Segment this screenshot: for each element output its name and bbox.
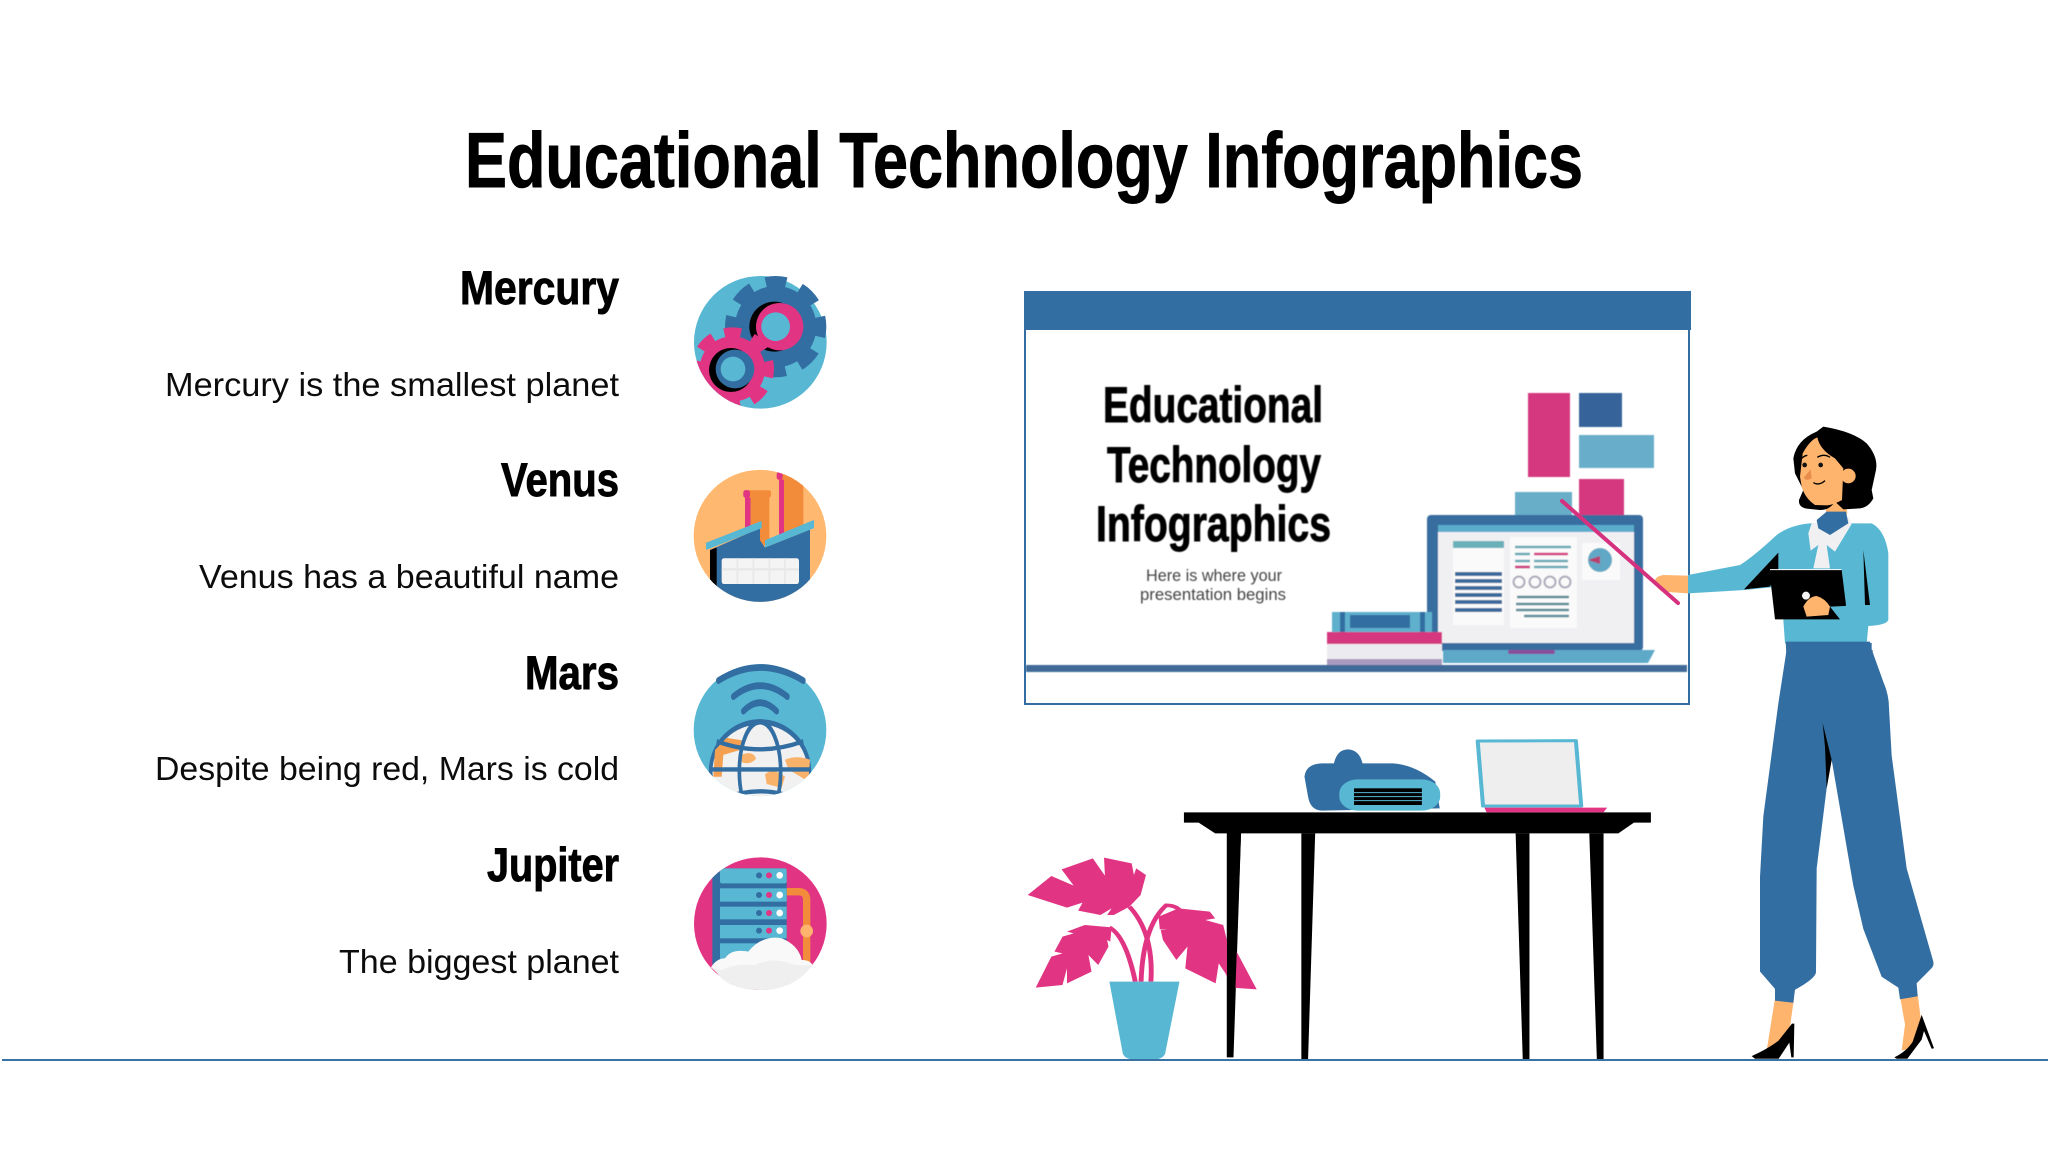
heading: Venus: Venus xyxy=(501,453,619,506)
slide subtitle: Here is where your xyxy=(1146,566,1282,585)
icon: tablet xyxy=(1769,570,1846,619)
heading: Mars: Mars xyxy=(525,646,619,699)
pointer stick xyxy=(1562,501,1678,603)
floor line xyxy=(2,1059,2048,1061)
panel: presentation slide xyxy=(1024,291,1691,704)
slide heading: Educational xyxy=(1103,377,1323,433)
slide heading xyxy=(1096,377,1331,552)
slide subtitle xyxy=(1140,566,1286,604)
slide ground band xyxy=(1026,665,1687,672)
slide subtitle: presentation begins xyxy=(1140,585,1286,604)
projector xyxy=(1304,749,1440,811)
item: Jupiter xyxy=(339,838,619,980)
belt xyxy=(1786,642,1873,660)
heading: Jupiter: Jupiter xyxy=(487,838,619,891)
text: Mercury description: Mercury is the smallest planet xyxy=(165,366,619,403)
plant xyxy=(1028,858,1257,1059)
slide heading: Infographics xyxy=(1096,496,1331,552)
slide content xyxy=(1026,377,1687,672)
icon: factory xyxy=(694,470,826,608)
table xyxy=(1184,812,1651,1060)
heading: Mercury: Mercury xyxy=(460,261,619,314)
icon: gears xyxy=(694,276,827,409)
legs, shoes and trousers xyxy=(1752,643,1934,1059)
text: Mars description: Despite being red, Mars is cold xyxy=(155,750,619,787)
front table leg over plant xyxy=(1227,833,1241,1057)
icon: pointing hand xyxy=(1655,575,1688,593)
slide blocks xyxy=(1515,393,1654,516)
text: Venus description: Venus has a beautiful name xyxy=(199,558,619,595)
text: Jupiter description: The biggest planet xyxy=(339,943,619,980)
item: Venus xyxy=(199,453,619,595)
icon: wifi globe xyxy=(694,664,826,796)
slide laptop xyxy=(1427,515,1655,663)
title: Educational Technology Infographics xyxy=(465,116,1583,204)
slide books xyxy=(1327,612,1442,665)
torso, head and tablet xyxy=(1655,427,1888,660)
laptop on table xyxy=(1478,741,1607,812)
panel: list of planets xyxy=(155,261,619,980)
item: Mars xyxy=(155,646,619,787)
slide heading: Technology xyxy=(1107,437,1321,493)
icon: server and cloud xyxy=(694,857,827,990)
presenter figure xyxy=(1655,427,1934,1059)
item: Mercury xyxy=(165,261,619,403)
